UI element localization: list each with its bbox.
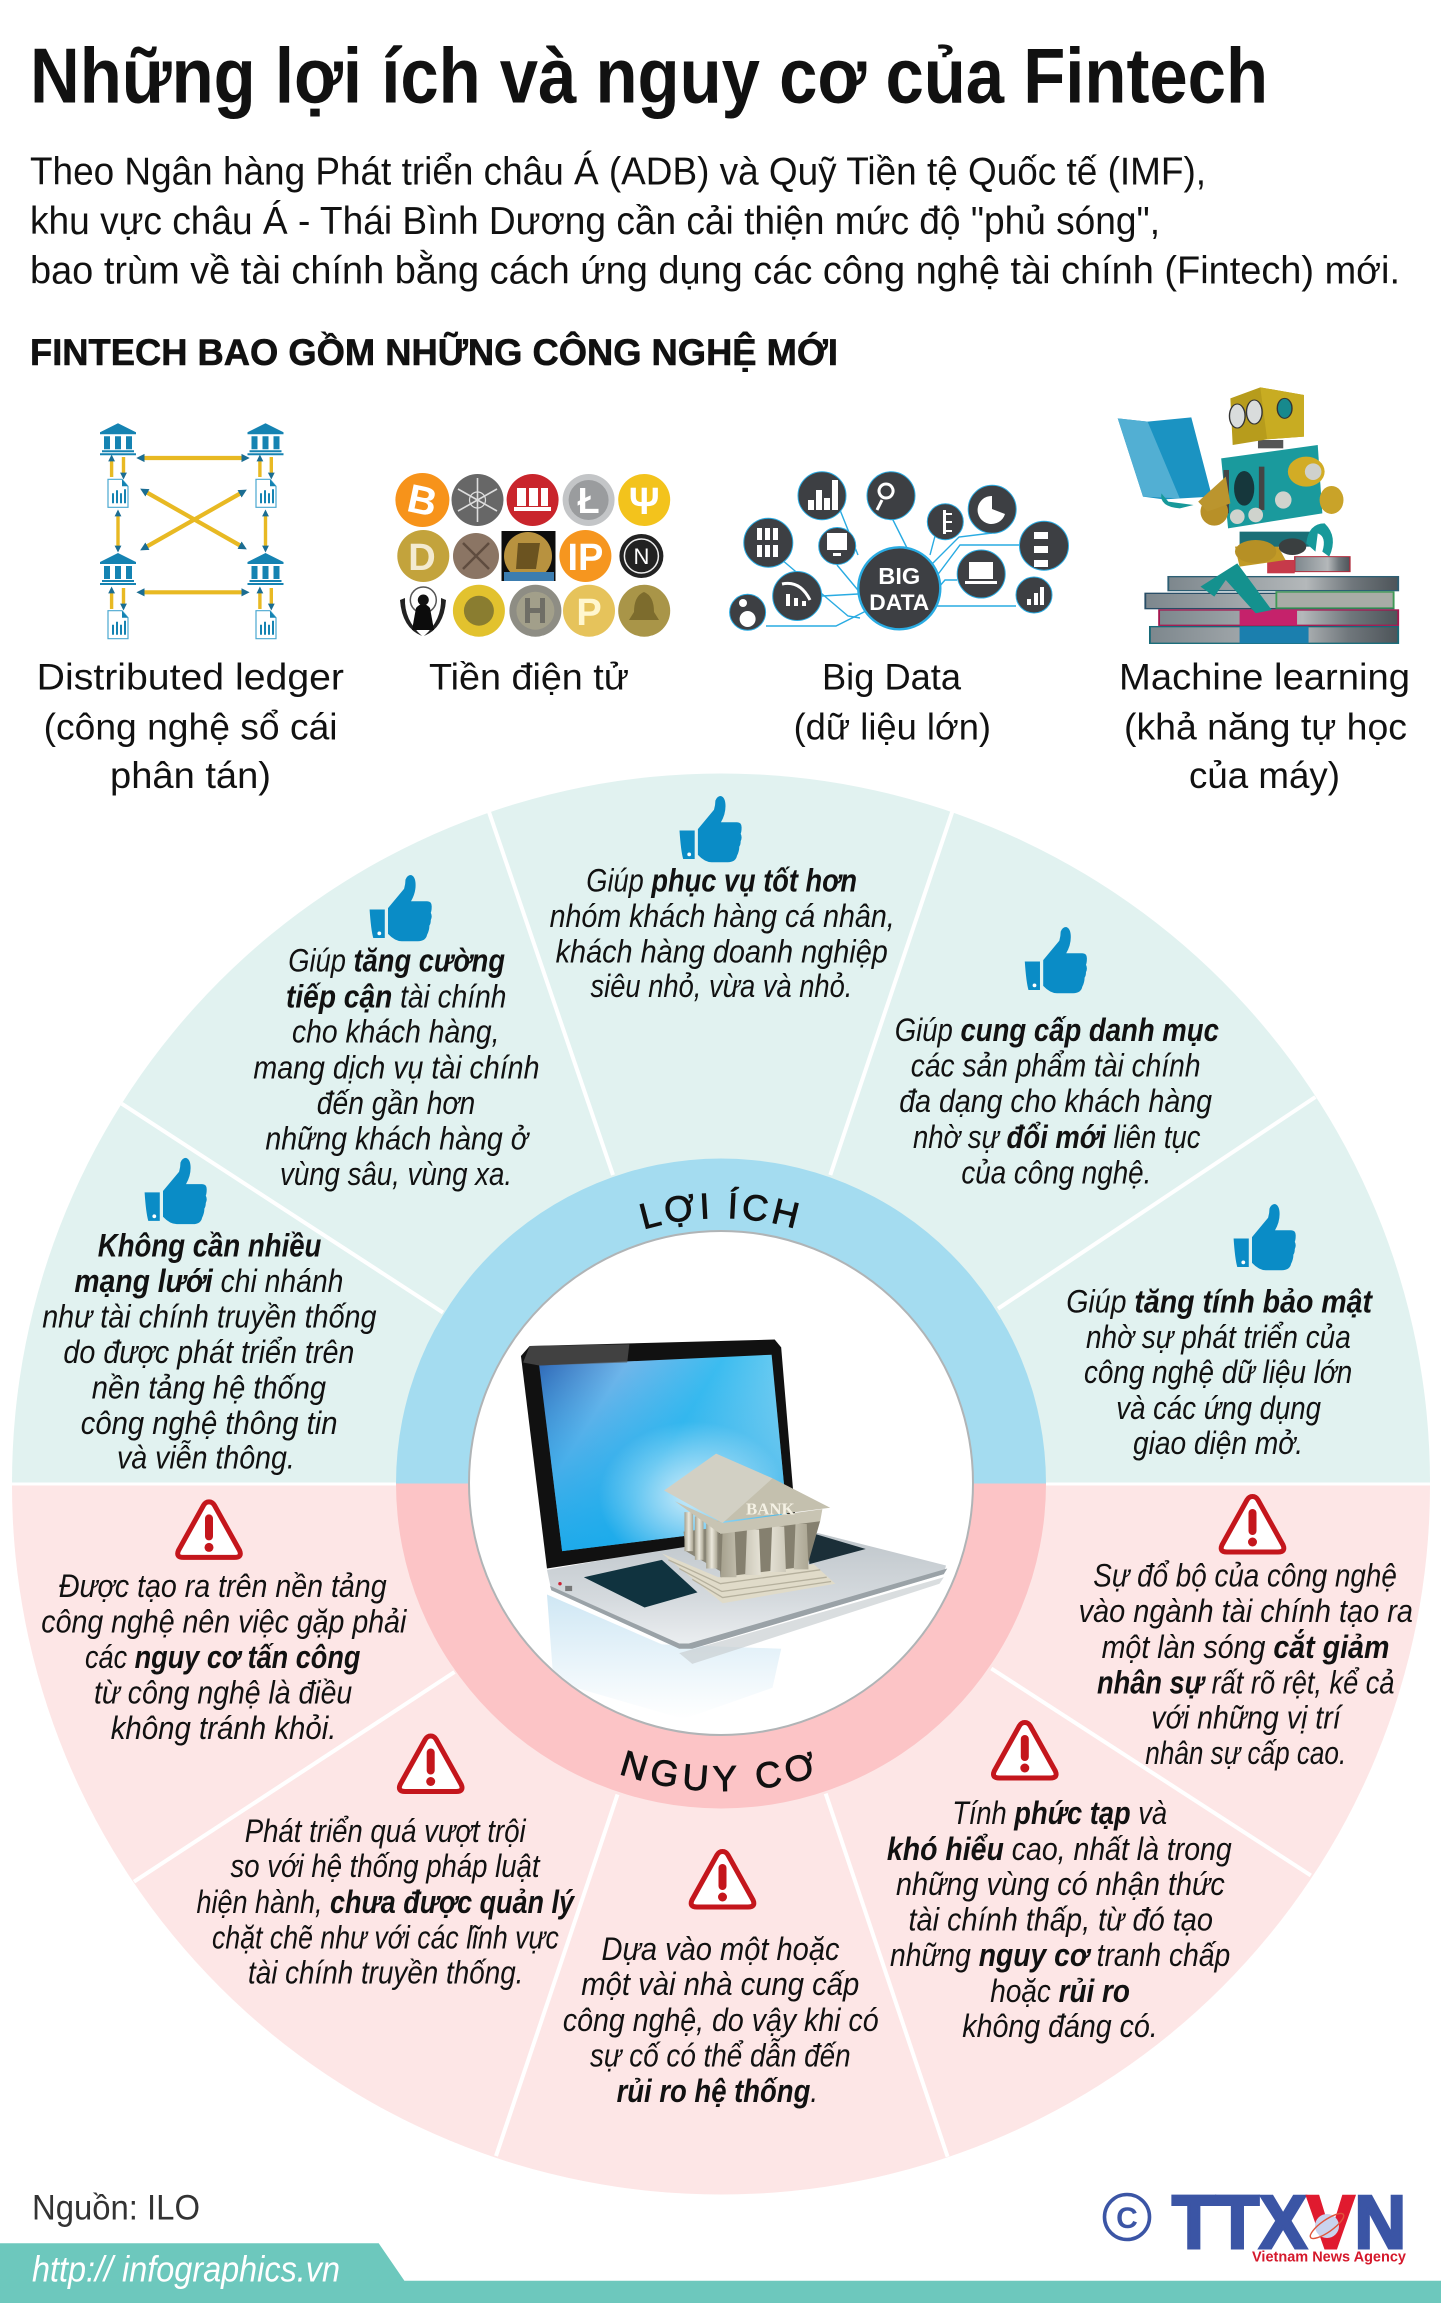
icon: distributed ledger (100, 423, 284, 639)
logo: TTXVN (1104, 2180, 1407, 2266)
text: một làn sóng cắt giảm (1102, 1629, 1389, 1665)
icon: robot on books (1118, 387, 1398, 643)
text (196, 1813, 576, 1991)
text: không tránh khỏi. (111, 1710, 336, 1746)
text: tiếp cận tài chính (286, 978, 506, 1014)
label: big data (794, 656, 991, 747)
icon: crypto coins: P (576, 592, 602, 634)
keyboards (584, 1560, 697, 1608)
label: distributed ledger: phân tán) (110, 755, 271, 796)
illustration: laptop with bank (521, 1340, 947, 1719)
label: distributed ledger: Distributed ledger (37, 656, 344, 697)
text: nhờ sự phát triển của (1086, 1319, 1351, 1355)
text: và viễn thông. (117, 1440, 295, 1476)
text (1066, 1283, 1373, 1461)
icon: crypto coins: N (633, 544, 649, 569)
ring: benefits half (396, 1158, 1046, 1484)
text: như tài chính truyền thống (42, 1299, 377, 1335)
roof and pediment (675, 1501, 822, 1534)
text: Giúp tăng cường (288, 942, 505, 978)
text: sự cố có thể dẫn đến (590, 2037, 851, 2073)
text: với những vị trí (1151, 1700, 1343, 1736)
icon: crypto coins (395, 473, 670, 637)
icon: crypto coins: Ł (578, 480, 600, 521)
icon: crypto coins: IP (567, 537, 603, 579)
intro text: khu vực châu Á - Thái Bình Dương cần cải thiện mức độ "phủ sóng", (30, 200, 1160, 243)
benefit 5 (1066, 1204, 1373, 1461)
screen (521, 1340, 796, 1569)
intro text: Theo Ngân hàng Phát triển châu Á (ADB) và Quỹ Tiền tệ Quốc tế (IMF), (30, 150, 1206, 193)
text: những khách hàng ở (265, 1121, 530, 1157)
intro text: bao trùm về tài chính bằng cách ứng dụng các công nghệ tài chính (Fintech) mới. (30, 249, 1400, 292)
icon: warning (178, 1502, 240, 1557)
text: vào ngành tài chính tạo ra (1079, 1593, 1413, 1629)
section heading: FINTECH BAO GỒM NHỮNG CÔNG NGHỆ MỚI (30, 331, 838, 373)
label: machine learning: của máy) (1189, 755, 1340, 796)
open blue book (1118, 417, 1212, 499)
icon: warning (691, 1852, 754, 1907)
text (1079, 1558, 1413, 1771)
robot arms (1200, 498, 1228, 526)
text: Không cần nhiều (98, 1228, 321, 1264)
copyright mark: C (1116, 2202, 1138, 2235)
text (41, 1568, 407, 1746)
wordmark: TTXVN (1172, 2180, 1406, 2264)
risk 2 (196, 1736, 576, 1991)
text: hiện hành, chưa được quản lý (196, 1884, 576, 1920)
text: Giúp tăng tính bảo mật (1066, 1283, 1373, 1319)
text: Dựa vào một hoặc (602, 1931, 840, 1967)
text (550, 863, 895, 1004)
text: Tính phức tạp và (952, 1795, 1167, 1831)
risk 3 (563, 1852, 879, 2109)
text: công nghệ, do vậy khi có (563, 2002, 879, 2038)
icon: thumbs up (680, 796, 742, 862)
benefit 4 (895, 927, 1219, 1191)
label: machine learning: Machine learning (1119, 656, 1410, 697)
source: Nguồn: ILO (32, 2188, 200, 2227)
icon: crypto coins: D (408, 537, 436, 579)
icon: big data: DATA (869, 590, 929, 615)
text: hoặc rủi ro (990, 1973, 1130, 2009)
text: các sản phẩm tài chính (911, 1048, 1200, 1084)
illustration: laptop with bank: BANK (746, 1499, 795, 1518)
icon: thumbs up (1234, 1204, 1296, 1270)
text: những vùng có nhận thức (896, 1866, 1225, 1902)
text: từ công nghệ là điều (94, 1675, 352, 1711)
robot head (1258, 440, 1283, 448)
label: distributed ledger: (công nghệ sổ cái (44, 706, 338, 747)
text: tài chính truyền thống. (248, 1955, 523, 1991)
icon: big data (730, 472, 1068, 630)
text: Giúp phục vụ tốt hơn (586, 863, 857, 899)
icon: warning (399, 1736, 462, 1792)
icon: crypto coins: B (403, 476, 441, 526)
label: machine learning (1119, 656, 1410, 796)
footer band (0, 2243, 1441, 2303)
agency name: Vietnam News Agency (1252, 2249, 1407, 2266)
text: Phát triển quá vượt trội (245, 1813, 526, 1849)
bank steps (662, 1553, 835, 1603)
label: machine learning: (khả năng tự học (1124, 706, 1407, 747)
text: rủi ro hệ thống. (617, 2073, 818, 2109)
label: crypto: Tiền điện tử (429, 656, 629, 697)
robot body (1221, 445, 1322, 528)
text: khách hàng doanh nghiệp (556, 933, 888, 969)
icon: thumbs up (145, 1158, 207, 1224)
text: vùng sâu, vùng xa. (280, 1156, 512, 1192)
text: đa dạng cho khách hàng (899, 1083, 1212, 1119)
icon: warning (1221, 1496, 1284, 1552)
tech labels (37, 656, 1410, 796)
copyright mark (1104, 2194, 1150, 2240)
text: khó hiểu cao, nhất là trong (887, 1831, 1232, 1867)
text (253, 942, 540, 1192)
text: tài chính thấp, từ đó tạo (908, 1902, 1213, 1938)
text: nhờ sự đổi mới liên tục (913, 1119, 1200, 1155)
icon: crypto coins: Ψ (629, 481, 660, 523)
text: một vài nhà cung cấp (581, 1966, 859, 2002)
text: không đáng có. (962, 2008, 1158, 2044)
risk 1 (41, 1502, 407, 1746)
text: của công nghệ. (961, 1155, 1151, 1191)
text (563, 1931, 879, 2109)
icon: warning (993, 1722, 1056, 1778)
text: đến gần hơn (317, 1085, 475, 1121)
diagram: benefit and risk wheel sectors (12, 774, 1430, 2194)
text (895, 1012, 1219, 1191)
center circle (469, 1231, 973, 1735)
text: chặt chẽ như với các lĩnh vực (212, 1919, 559, 1955)
icon: thumbs up (370, 875, 432, 941)
text: Giúp cung cấp danh mục (895, 1012, 1219, 1048)
label: distributed ledger (37, 656, 344, 796)
risk 4 (887, 1722, 1232, 2044)
columns (684, 1512, 808, 1577)
globe in logo (1307, 2210, 1347, 2242)
ring label: benefits: LỢI ÍCH (640, 1186, 799, 1230)
title: Những lợi ích và nguy cơ của Fintech (30, 32, 1268, 120)
books stack (1145, 557, 1398, 643)
text: công nghệ thông tin (81, 1405, 338, 1441)
text (887, 1795, 1232, 2044)
text: do được phát triển trên (63, 1334, 354, 1370)
benefit 1 (42, 1158, 377, 1476)
text: nền tảng hệ thống (92, 1370, 326, 1406)
text: nhân sự rất rõ rệt, kể cả (1097, 1664, 1394, 1700)
risk 5 (1079, 1496, 1413, 1771)
laptop base (679, 1577, 944, 1664)
text: mang dịch vụ tài chính (253, 1049, 540, 1085)
text: Được tạo ra trên nền tảng (59, 1568, 387, 1604)
label: big data: (dữ liệu lớn) (794, 706, 991, 747)
text: nhóm khách hàng cá nhân, (550, 898, 895, 934)
ring label: risks: NGUY CƠ (620, 1750, 812, 1792)
ring: risks half (396, 1484, 1046, 1808)
text: cho khách hàng, (292, 1014, 500, 1050)
text: công nghệ dữ liệu lớn (1084, 1354, 1352, 1390)
benefit 2 (253, 875, 540, 1192)
text: những nguy cơ tranh chấp (890, 1937, 1230, 1973)
label: big data: Big Data (822, 656, 961, 697)
icon: thumbs up (1025, 927, 1087, 993)
text: nhân sự cấp cao. (1145, 1735, 1346, 1771)
benefit 3 (550, 796, 895, 1004)
laptop reflection (547, 1594, 781, 1698)
text: giao diện mở. (1133, 1425, 1303, 1461)
text: siêu nhỏ, vừa và nhỏ. (590, 968, 852, 1004)
text: và các ứng dụng (1116, 1390, 1321, 1426)
text: so với hệ thống pháp luật (230, 1848, 540, 1884)
text: công nghệ nên việc gặp phải (41, 1603, 407, 1639)
intro text (30, 150, 1400, 292)
text: mạng lưới chi nhánh (74, 1263, 343, 1299)
text (42, 1228, 377, 1476)
text: Sự đổ bộ của công nghệ (1093, 1558, 1397, 1594)
icon: big data: BIG (878, 563, 920, 589)
footer url: http:// infographics.vn (32, 2249, 340, 2290)
text: các nguy cơ tấn công (85, 1639, 360, 1675)
robot legs (1235, 543, 1286, 567)
